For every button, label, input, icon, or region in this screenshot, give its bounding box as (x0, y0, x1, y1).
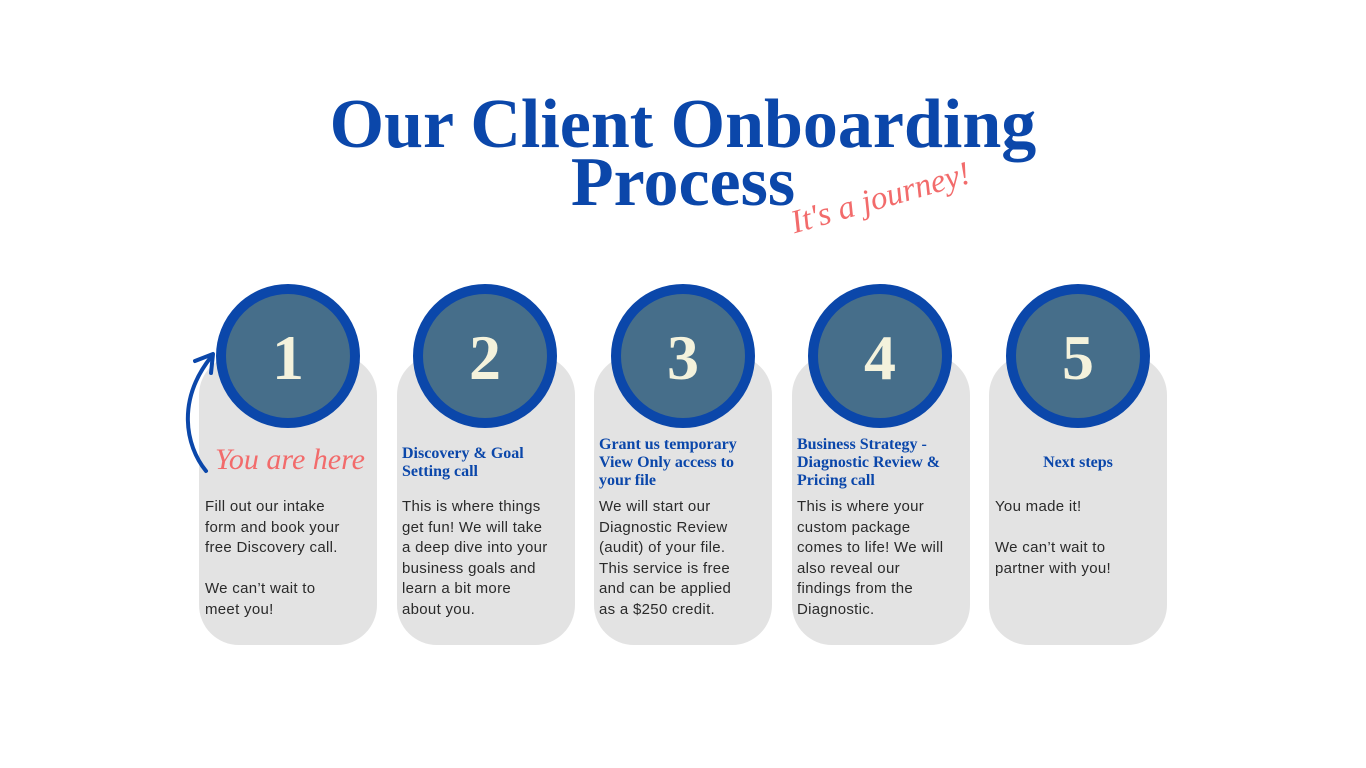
you are here: You are here (215, 443, 365, 476)
text 4: This is where your (797, 498, 924, 515)
heading 3: View Only access to (599, 454, 734, 471)
circle 1 (216, 284, 360, 428)
heading 3 (599, 436, 737, 489)
heading 4: Pricing call (797, 472, 875, 489)
text 5 (995, 498, 1111, 576)
text 5: partner with you! (995, 560, 1111, 576)
card 5 (989, 355, 1167, 645)
circle 1: 1 (272, 322, 304, 393)
heading 4 (797, 436, 940, 489)
circle 5: 5 (1062, 322, 1094, 393)
heading 4: Diagnostic Review & (797, 454, 940, 471)
card 4 (792, 355, 970, 645)
text 1: form and book your (205, 518, 340, 536)
heading 2 (402, 445, 524, 480)
heading 3: your file (599, 472, 656, 489)
heading 2: Setting call (402, 463, 478, 480)
text 2: learn a bit more (402, 580, 511, 597)
card 3 (594, 355, 772, 645)
text 4 (797, 498, 943, 618)
tagline: It's a journey! (787, 155, 974, 241)
arrow (186, 352, 215, 474)
text 3: and can be applied (599, 580, 731, 597)
text 1: meet you! (205, 600, 274, 618)
text 1: free Discovery call. (205, 539, 338, 556)
circle 2: 2 (469, 322, 501, 393)
circle 4: 4 (864, 322, 896, 393)
text 1: We can’t wait to (205, 580, 315, 597)
text 5: You made it! (995, 498, 1081, 515)
text 3: We will start our (599, 498, 711, 515)
text 3: Diagnostic Review (599, 518, 727, 536)
circle 2 (413, 284, 557, 428)
text 5: We can’t wait to (995, 539, 1105, 556)
heading 2: Discovery & Goal (402, 445, 524, 462)
text 1 (205, 498, 340, 618)
card 2 (397, 355, 575, 645)
text 2: a deep dive into your (402, 539, 548, 556)
card 1 (199, 355, 377, 645)
text 1: Fill out our intake (205, 498, 325, 515)
text 4: Diagnostic. (797, 600, 875, 618)
text 3 (599, 498, 731, 618)
title: Process (571, 144, 795, 221)
text 3: This service is free (599, 560, 730, 576)
text 2: business goals and (402, 560, 536, 576)
text 2: get fun! We will take (402, 518, 542, 536)
text 2 (402, 498, 548, 618)
text 4: custom package (797, 518, 910, 536)
heading 3: Grant us temporary (599, 436, 737, 453)
title: Our Client Onboarding (330, 86, 1036, 163)
text 4: comes to life! We will (797, 539, 943, 556)
text 3: as a $250 credit. (599, 600, 715, 618)
circle 5 (1006, 284, 1150, 428)
title (330, 86, 1036, 221)
text 4: findings from the (797, 580, 913, 597)
circle 4 (808, 284, 952, 428)
circle 3: 3 (667, 322, 699, 393)
heading 5: Next steps (1043, 454, 1113, 471)
circle 3 (611, 284, 755, 428)
heading 4: Business Strategy - (797, 436, 927, 453)
text 3: (audit) of your file. (599, 539, 725, 556)
text 2: This is where things (402, 498, 541, 515)
text 2: about you. (402, 600, 475, 618)
text 4: also reveal our (797, 560, 900, 576)
